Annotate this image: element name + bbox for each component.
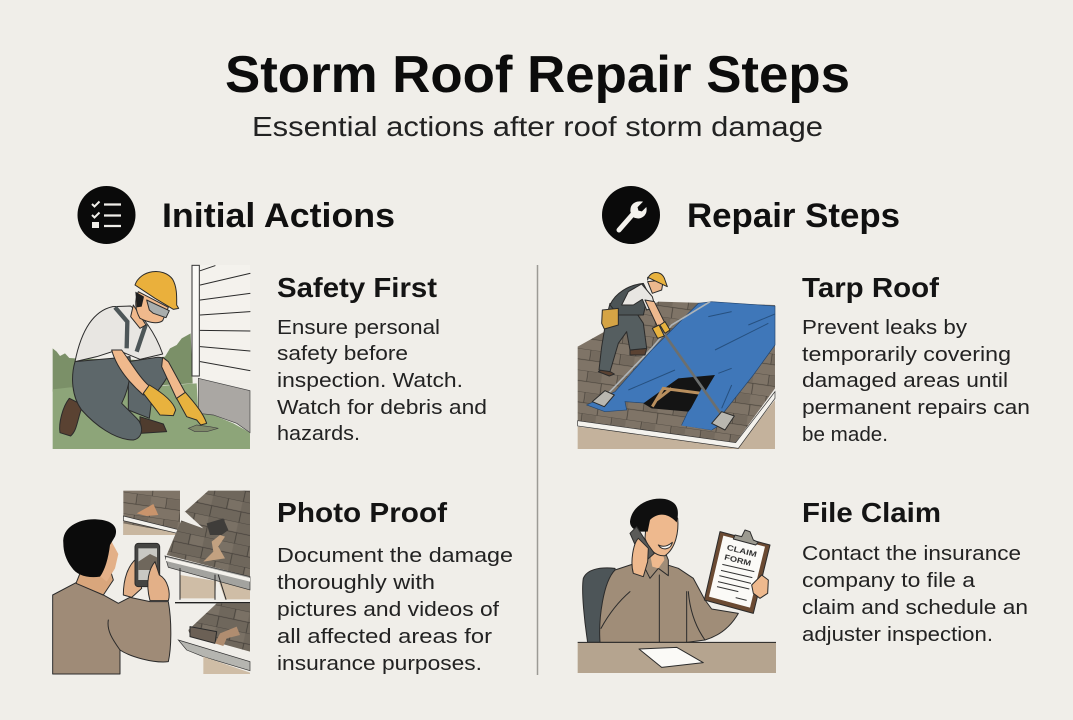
panel: initial actions bbox=[53, 186, 513, 675]
step text: tarp roof: damaged areas until bbox=[802, 369, 1008, 392]
step text: safety first bbox=[277, 316, 487, 445]
illustration: worker inspecting ground in hard hat bbox=[53, 265, 250, 449]
heading: repair steps: Repair Steps bbox=[687, 197, 900, 235]
step text: photo proof: pictures and videos of bbox=[277, 598, 499, 621]
step text: file claim bbox=[802, 542, 1028, 646]
step title: tarp roof: Tarp Roof bbox=[802, 272, 940, 303]
step text: tarp roof: be made. bbox=[802, 423, 888, 446]
step text: file claim: Contact the insurance bbox=[802, 542, 1021, 565]
step text: photo proof: thoroughly with bbox=[277, 571, 435, 594]
step text: tarp roof: temporarily covering bbox=[802, 343, 1011, 366]
step title: file claim: File Claim bbox=[802, 497, 941, 528]
step text: photo proof: all affected areas for bbox=[277, 625, 492, 648]
step text: file claim: company to file a bbox=[802, 569, 976, 592]
subtitle: Essential actions after roof storm damage bbox=[252, 111, 823, 142]
text: claim form: FORM bbox=[723, 553, 752, 568]
step text: photo proof: insurance purposes. bbox=[277, 652, 482, 675]
heading: initial actions: Initial Actions bbox=[162, 197, 395, 235]
step text: safety first: inspection. Watch. bbox=[277, 369, 463, 392]
step text: safety first: hazards. bbox=[277, 422, 360, 445]
step text: safety first: Ensure personal bbox=[277, 316, 440, 339]
step text: file claim: claim and schedule an bbox=[802, 596, 1028, 619]
panel: repair steps bbox=[578, 186, 1030, 673]
step title: photo proof: Photo Proof bbox=[277, 497, 448, 528]
step text: file claim: adjuster inspection. bbox=[802, 623, 993, 646]
illustration: worker tarping damaged roof bbox=[578, 272, 775, 449]
step text: safety first: Watch for debris and bbox=[277, 396, 487, 419]
title: Storm Roof Repair Steps bbox=[225, 46, 850, 104]
step text: safety first: safety before bbox=[277, 342, 408, 365]
step text: tarp roof: Prevent leaks by bbox=[802, 316, 968, 339]
text: claim form bbox=[723, 543, 758, 569]
step text: tarp roof bbox=[802, 316, 1030, 446]
text: claim form: CLAIM bbox=[726, 543, 758, 559]
step text: tarp roof: permanent repairs can bbox=[802, 396, 1030, 419]
illustration: man on phone holding claim form bbox=[578, 499, 776, 673]
step title: safety first: Safety First bbox=[277, 272, 437, 303]
step text: photo proof: Document the damage bbox=[277, 544, 513, 567]
icon: wrench bbox=[602, 186, 660, 244]
step text: photo proof bbox=[277, 544, 513, 675]
illustration: man photographing roof damage with phone bbox=[53, 491, 250, 674]
icon: checklist bbox=[78, 186, 136, 244]
